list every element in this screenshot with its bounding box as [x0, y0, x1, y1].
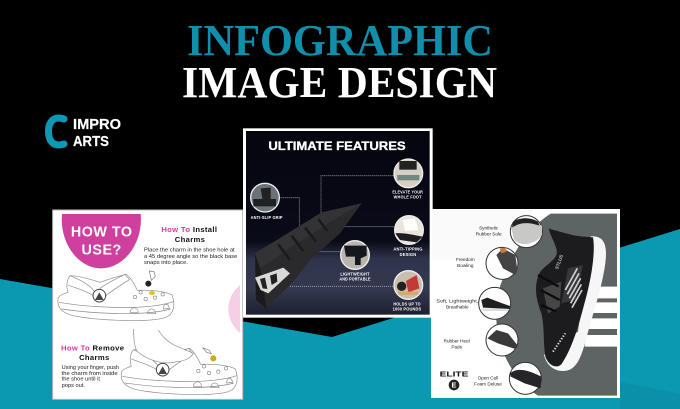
heading: ultimate features: ULTIMATE FEATURES: [268, 139, 406, 153]
callout: open cell foam deluse: Foam Deluse: [474, 381, 502, 386]
label: elevate your whole foot: [392, 189, 423, 200]
label: anti-tipping design: DESIGN: [400, 252, 417, 257]
white stripes: [585, 287, 617, 347]
dotted connector lines: [279, 176, 394, 286]
text: remove instructions: pops out.: [62, 383, 85, 389]
text: install instructions: Place the charm in the shoe hole at: [144, 248, 235, 254]
heading: how to install charms: How To Install: [161, 225, 217, 234]
panel: shoe features: [431, 209, 620, 398]
logo on ramp: [255, 268, 290, 293]
background: teal angled band: [0, 229, 680, 409]
callout: synthetic rubber sole: Synthetic: [479, 226, 499, 231]
icon: anti-tipping design: [395, 216, 423, 244]
illustration: clog with charm: [58, 271, 174, 321]
callout: freedom bowling: [456, 247, 518, 279]
callout: rubber heel pads: Rubber Heel: [444, 338, 470, 343]
heading: how to remove charms: [61, 343, 124, 362]
callout: soft, lightweight, breathable: Breathable: [446, 304, 469, 309]
label: lightweight and portable: [339, 272, 371, 282]
badge: how to use: USE?: [82, 242, 122, 258]
callout: synthetic rubber sole: [476, 216, 542, 248]
label: elevate your whole foot: WHOLE FOOT: [394, 195, 422, 200]
heading: how to remove charms: Charms: [79, 353, 110, 362]
callout: rubber heel pads: [444, 324, 518, 356]
heading: how to remove charms: How To Remove: [61, 343, 124, 352]
title: [182, 16, 497, 107]
text: install instructions: [144, 248, 237, 266]
label: lightweight and portable: LIGHTWEIGHT: [340, 272, 370, 277]
text: remove instructions: the shoe until it: [62, 377, 101, 383]
product: wedge ramp: [255, 203, 362, 309]
icon: elevate your whole foot: [394, 159, 423, 188]
heading: how to install charms: [161, 225, 217, 244]
badge: how to use: HOW TO: [71, 225, 132, 241]
callout: freedom bowling: Freedom: [456, 257, 475, 262]
gray background shape: [496, 214, 617, 396]
panel: ultimate features: [243, 128, 433, 318]
label: anti-tipping design: [393, 247, 423, 257]
callout: open cell foam deluse: [474, 362, 541, 394]
illustration: clog with hand removing charm: [121, 329, 237, 395]
brand: elite logo: E: [452, 381, 457, 390]
heading: how to install charms: Charms: [175, 235, 205, 244]
callout: soft, lightweight, breathable: [436, 287, 511, 319]
pink side circle: [228, 286, 240, 332]
text: remove instructions: Using your finger, push: [62, 365, 119, 371]
callout: rubber heel pads: Pads: [451, 344, 463, 349]
label: lightweight and portable: AND PORTABLE: [339, 277, 371, 282]
icon: logo letter C: [48, 118, 64, 145]
label: anti-tipping design: ANTI-TIPPING: [393, 247, 423, 252]
text: install instructions: snaps into place.: [144, 260, 188, 266]
callout: open cell foam deluse: Open Cell: [478, 375, 498, 380]
text: remove instructions: [62, 365, 119, 389]
label: holds up to 1000 pounds: 1000 POUNDS: [393, 306, 421, 311]
label: holds up to 1000 pounds: HOLDS UP TO: [393, 301, 421, 306]
callout: freedom bowling: Bowling: [457, 263, 474, 268]
logo: Impro Arts: IMPRO: [73, 117, 121, 133]
panel: how to use charms: [52, 210, 244, 400]
product: running shoe: [536, 228, 606, 371]
brand: elite logo: [440, 369, 468, 390]
callout: soft, lightweight, breathable: Soft, Lightweight,: [436, 298, 478, 303]
logo: Impro Arts: [48, 117, 121, 150]
callout: synthetic rubber sole: Rubber Sole: [476, 232, 502, 237]
label: elevate your whole foot: ELEVATE YOUR: [392, 189, 423, 194]
logo: Impro Arts: ARTS: [73, 134, 109, 150]
text: install instructions: a 45 degree angle so the black base: [144, 254, 237, 260]
icon: holds up to 1000 pounds: [394, 271, 423, 299]
label: holds up to 1000 pounds: [393, 301, 421, 311]
brand: elite logo: ELITE: [440, 369, 468, 378]
title: INFOGRAPHIC: [187, 16, 493, 65]
label: anti-slip grip: ANTI-SLIP GRIP: [251, 215, 283, 220]
badge: how to use: [62, 214, 141, 268]
text: remove instructions: the charm from inside: [62, 371, 118, 377]
icon: anti-slip grip: [251, 183, 279, 212]
icon: lightweight and portable: [341, 241, 369, 269]
title: IMAGE DESIGN: [182, 58, 497, 107]
product: running shoe: STLUS: [554, 254, 564, 270]
